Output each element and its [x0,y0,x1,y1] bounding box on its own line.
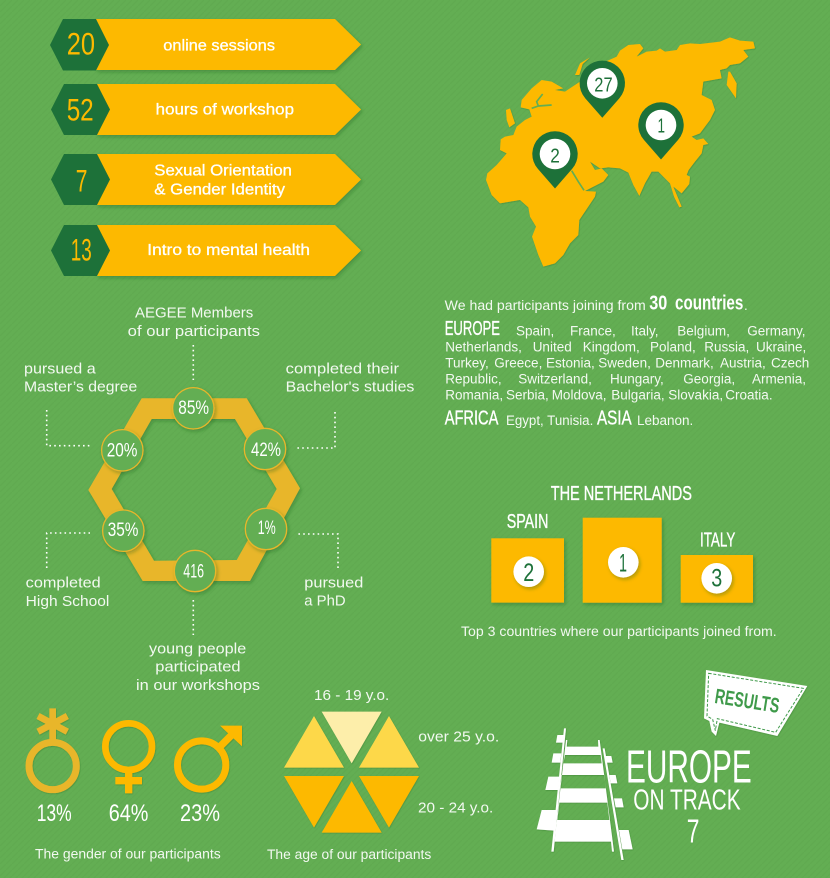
label: over 25: over 25 y.o. [418,729,499,746]
text block: participating countries: Switzerland, [518,371,592,386]
map: Europe, Africa and Asia [486,37,755,267]
text block: participating countries: Slovakia, [668,387,723,402]
panel: gender of participants [29,708,242,861]
logo wordmark: on track: ON TRACK [633,784,741,816]
stat: 13 percent: 13% [37,800,72,827]
stat: Bachelor's studies: completed their [286,360,399,377]
stat: Master's degree: 20% [107,439,137,461]
stat: High School [26,510,144,610]
text block: participating countries: . [744,298,748,313]
pin: 27 in Europe: 27 [594,74,613,97]
podium step: Italy: 3 [711,565,722,593]
text block: participating countries: Russia, [704,340,749,355]
pin: 1 in Asia: 1 [658,114,665,137]
text block: participating countries: Republic, [445,371,502,386]
pin: 27 in Europe [580,61,625,118]
pin: 2 in Africa [532,131,578,188]
stat: PhD: a PhD [304,593,346,610]
stat: young people: 416 [183,560,204,582]
text block: participating countries: Armenia, [752,371,806,386]
text block: participating countries: Turkey, [445,355,489,370]
arrow: intro to mental health: 13 [71,232,92,268]
stat: High School: 35% [108,519,138,541]
stat: Master's degree: pursued a [24,360,96,377]
text block: participating countries: Belgium, [677,324,730,339]
pin: 2 in Africa: 2 [550,144,560,167]
arrow: sexual orientation and gender identity: 7 [76,163,87,199]
stat: AEGEE members [128,305,260,429]
text block: participating countries: countries [675,292,743,314]
logo: Europe on Track 7 [537,728,752,860]
icon: male symbol [177,726,242,789]
arrow: sexual orientation and gender identity: Sexual Orientation [154,163,292,180]
stat: young people: in our workshops [136,677,260,694]
icon: non-binary symbol [29,708,76,790]
text block: participating countries: Bulgaria, [611,387,665,402]
stat: PhD: pursued [304,574,363,591]
podium step: The Netherlands [551,483,692,603]
icon: female symbol [105,723,152,793]
arrow: sexual orientation and gender identity: & Gender Identity [154,181,285,198]
podium step: The Netherlands: THE NETHERLANDS [551,483,692,505]
podium: top 3 countries [461,483,777,639]
text block: participating countries: Georgia, [683,371,735,386]
text block: participating countries: Denmark, [655,355,714,370]
arrow: hours of workshop [51,84,361,135]
text block: participating countries: Italy, [631,324,659,339]
podium step: Italy: ITALY [700,530,735,552]
text block: participating countries: Hungary, [610,371,664,386]
label: 16 to 19: 16 - 19 y.o. [314,687,389,704]
text block: participating countries: Ukraine, [756,340,806,355]
text block: participating countries: Estonia, [546,355,595,370]
stat: young people: young people [149,640,246,657]
text block: participating countries: Germany, [747,324,806,339]
text block: participating countries: Serbia, [506,387,549,402]
arrow: online sessions [50,19,361,70]
caption: age: The age of our participants [267,847,432,862]
text block: participating countries [445,292,809,429]
podium step: Spain [491,511,564,603]
stat: young people [136,550,260,694]
text block: participating countries: Spain, [516,324,554,339]
logo wordmark: Europe: EUROPE [626,740,752,792]
arrow: hours of workshop: 52 [67,91,94,127]
caption: top 3 countries: Top 3 countries where our participants joined from. [461,624,777,639]
panel: workshop topics [50,19,361,276]
stat: AEGEE members: of our participants [128,323,260,340]
podium step: Spain: SPAIN [507,511,548,533]
pin: 1 in Asia [638,102,684,160]
logo wordmark: 7: 7 [687,812,699,849]
stat: Master's degree: Master’s degree [24,379,137,396]
text block: participating countries: ASIA [597,407,632,429]
text block: participating countries: Lebanon. [637,413,693,428]
podium step: Italy [681,530,753,603]
panel: age of participants [267,687,499,862]
text block: participating countries: Greece, [494,355,542,370]
text block: participating countries: Austria, [720,355,766,370]
text block: participating countries: Moldova, [552,387,606,402]
text block: participating countries: Czech [771,355,809,370]
text block: participating countries: Poland, [650,340,696,355]
stat: Bachelor's studies [244,360,414,470]
arrow: intro to mental health [51,225,361,276]
arrow: online sessions: 20 [67,25,95,61]
stat: AEGEE members: 85% [178,397,209,419]
stat: Master's degree [24,360,143,471]
stat: Bachelor's studies: 42% [251,439,281,461]
arrow: intro to mental health: Intro to mental health [147,242,310,259]
stat: High School: High School [26,593,109,610]
text block: participating countries: We had participants joining from [445,298,646,313]
text block: participating countries: France, [570,324,616,339]
callout: results speech bubble [704,670,807,736]
stat: 23 percent: 23% [180,800,220,827]
stat: young people: participated [155,659,241,676]
stat: 64 percent: 64% [109,800,148,827]
text block: participating countries: AFRICA [445,407,499,429]
chart: participant background hexagon [24,305,414,694]
arrow: sexual orientation and gender identity [51,154,361,205]
arrow: hours of workshop: hours of workshop [156,101,294,118]
chart: age triangles [284,712,419,833]
text block: participating countries: Sweden, [598,355,651,370]
text block: participating countries: Egypt, Tunisia. [506,413,593,428]
text block: participating countries: Kingdom, [583,340,640,355]
text block: participating countries: 30 [649,292,667,314]
stat: AEGEE members: AEGEE Members [135,305,253,322]
stat: Bachelor's studies: Bachelor's studies [286,379,414,396]
text block: participating countries: EUROPE [445,318,500,340]
stat: High School: completed [26,575,101,592]
text block: participating countries: Netherlands, [445,340,522,355]
text block: participating countries: United [533,340,572,355]
callout: results speech bubble: RESULTS [713,685,781,718]
podium step: Spain: 2 [523,559,534,587]
arrow: online sessions: online sessions [163,38,275,55]
stat: PhD: 1% [258,517,276,539]
label: 20 to 24: 20 - 24 y.o. [418,800,493,817]
caption: gender: The gender of our participants [35,846,221,861]
stat: PhD [245,508,363,610]
icon: railway track [537,728,633,860]
text block: participating countries: Croatia. [725,387,773,402]
text block: participating countries: Romania, [445,387,503,402]
podium step: The Netherlands: 1 [619,550,627,578]
